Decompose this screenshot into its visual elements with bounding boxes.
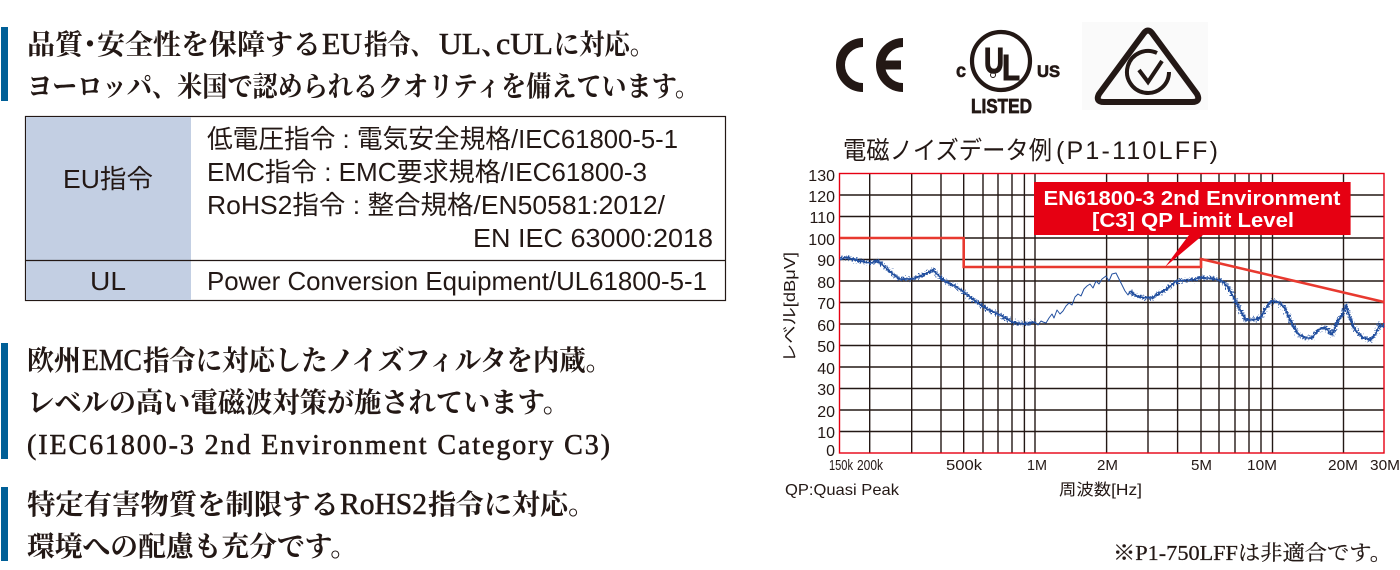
- y-axis tick labels: 60: [817, 318, 835, 335]
- chart title: 電磁ノイズデータ例: [843, 137, 1052, 165]
- table: directives and standards: UL: [90, 266, 126, 296]
- table: directives and standards: RoHS2指令 : 整合規格/EN50581:2012/: [207, 190, 666, 220]
- section: RoHS2 text: 特定有害物質を制限する: [27, 489, 339, 521]
- x-axis tick labels: 500k: [946, 457, 983, 474]
- section: EMC filter text: EMC: [82, 342, 142, 377]
- chart title: (P1-110LFF): [1056, 137, 1218, 165]
- x-axis tick labels: [829, 457, 1400, 474]
- section: RoHS2 text: [1, 486, 596, 563]
- x-axis tick labels: 2M: [1097, 457, 1118, 474]
- y-axis tick labels: [808, 168, 835, 460]
- table: directives and standards: Power Conversion Equipment/UL61800-5-1: [207, 266, 707, 296]
- section: RoHS2 text: RoHS2: [340, 486, 427, 521]
- section: EU and UL compliance heading: EU: [322, 26, 362, 61]
- table: directives and standards: EN IEC 63000:2018: [473, 223, 713, 253]
- noise curve: [840, 257, 1384, 340]
- limit line: [840, 238, 1384, 302]
- legend note: QP: QP:Quasi Peak: [785, 482, 900, 499]
- section: EMC filter text: (IEC61800-3 2nd Environment Category C3): [27, 430, 610, 461]
- table: directives and standards: 低電圧指令 : 電気安全規格/IEC61800-5-1: [207, 124, 678, 154]
- icon: CE mark: [840, 42, 903, 88]
- callout: limit level: [C3] QP Limit Level: [1092, 210, 1294, 232]
- icon: cUL US listed mark: c: [956, 61, 966, 82]
- y-axis tick labels: 70: [817, 296, 835, 313]
- section: EU and UL compliance heading: ヨーロッパ、米国で認められるクオリティを備えています。: [27, 71, 700, 103]
- grid lines: [840, 174, 1384, 453]
- section: EU and UL compliance heading: UL: [439, 26, 481, 61]
- chart: electromagnetic noise data: [782, 168, 1400, 499]
- y-axis tick labels: 10: [817, 425, 835, 442]
- y-axis tick labels: 120: [808, 189, 835, 206]
- x-axis tick labels: 150k: [829, 457, 853, 474]
- icon: cUL US listed mark: US: [1037, 62, 1060, 81]
- callout: limit level: EN61800-3 2nd Environment: [1044, 188, 1341, 210]
- y-axis tick labels: 80: [817, 275, 835, 292]
- table: directives and standards: EU指令: [63, 164, 153, 194]
- section: EMC filter text: 欧州: [27, 345, 81, 377]
- y-axis tick labels: 90: [817, 253, 835, 270]
- section: EU and UL compliance heading: 指令、: [364, 29, 434, 61]
- section: EMC filter text: 指令に対応したノイズフィルタを内蔵。: [143, 345, 612, 377]
- y-axis tick labels: 130: [808, 168, 835, 185]
- section: EU and UL compliance heading: に対応。: [554, 29, 655, 61]
- icon: RCM triangle mark: [1082, 22, 1208, 110]
- footnote: ※P1-750LFFは非適合です。: [1113, 541, 1392, 565]
- icon: cUL US listed mark: LISTED: [971, 96, 1032, 118]
- y-axis title: レベル[dBμV]: [782, 252, 799, 362]
- x-axis tick labels: 20M: [1328, 457, 1358, 474]
- section: EU and UL compliance heading: [1, 26, 700, 103]
- y-axis tick labels: 110: [809, 210, 835, 227]
- section: EMC filter text: レベルの高い電磁波対策が施されています。: [27, 387, 570, 419]
- table: directives and standards: EMC指令 : EMC要求規格/IEC61800-3: [207, 157, 647, 187]
- section: RoHS2 text: 環境への配慮も充分です。: [27, 530, 358, 563]
- y-axis tick labels: 30: [817, 382, 835, 399]
- y-axis tick labels: 100: [808, 232, 835, 249]
- section: EU and UL compliance heading: cUL: [496, 26, 553, 61]
- chart title: [843, 137, 1218, 165]
- x-axis tick labels: 30M: [1370, 457, 1400, 474]
- section: RoHS2 text: 指令に対応。: [428, 489, 596, 521]
- x-axis tick labels: 5M: [1191, 457, 1212, 474]
- x-axis title: 周波数[Hz]: [1059, 481, 1142, 499]
- y-axis tick labels: 0: [826, 443, 835, 460]
- y-axis tick labels: 20: [817, 404, 835, 421]
- table: directives and standards: [25, 116, 726, 300]
- plot frame: [840, 174, 1384, 453]
- section: EU and UL compliance heading: 、: [481, 30, 509, 61]
- icon: cUL US listed mark: L: [1002, 47, 1020, 88]
- y-axis tick labels: 40: [817, 361, 835, 378]
- icon: cUL US listed mark: U: [984, 40, 1004, 81]
- icon: cUL US listed mark: [956, 32, 1060, 118]
- section: EMC filter text: [1, 342, 612, 461]
- callout: limit level: [1034, 182, 1351, 267]
- x-axis tick labels: 10M: [1247, 457, 1277, 474]
- x-axis tick labels: 200k: [857, 457, 883, 474]
- y-axis tick labels: 50: [817, 339, 835, 356]
- section: EU and UL compliance heading: 品質･安全性を保障する: [27, 29, 321, 61]
- x-axis tick labels: 1M: [1027, 457, 1047, 474]
